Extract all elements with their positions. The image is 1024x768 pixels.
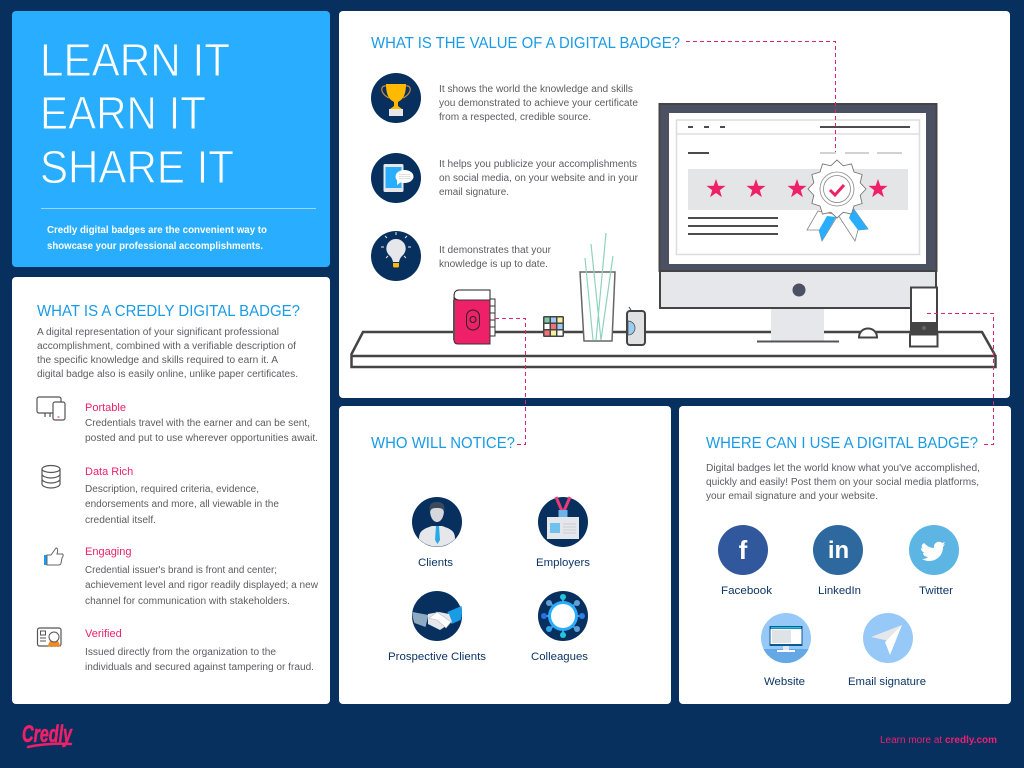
hero subtitle: showcase your professional accomplishments. xyxy=(47,240,263,252)
icon: email signature xyxy=(863,613,913,663)
icon: tablet with speech bubble xyxy=(371,153,421,203)
item: portable: Credentials travel with the earner and can be sent, xyxy=(85,418,310,429)
intro text: Digital badges let the world know what you've accomplished, xyxy=(706,463,980,474)
item: data rich: credential itself. xyxy=(85,515,156,526)
item: engaging xyxy=(85,546,319,607)
icon: trophy xyxy=(371,73,421,123)
title: EARN IT xyxy=(40,87,206,139)
value text 3 xyxy=(439,245,552,270)
illustration: phone on dock xyxy=(910,288,938,346)
illustration: monitor xyxy=(660,104,936,342)
heading: WHERE CAN I USE A DIGITAL BADGE? xyxy=(706,435,978,452)
item: data rich: Description, required criteria, evidence, xyxy=(85,484,259,495)
dashed connector: value heading to monitor xyxy=(686,42,836,152)
label: Facebook xyxy=(721,585,773,597)
icon: linkedin xyxy=(813,525,863,575)
icon: colleagues xyxy=(538,591,588,641)
item: portable xyxy=(85,402,318,444)
label: Prospective Clients xyxy=(388,651,487,663)
definition text: the specific knowledge and skills required to earn it. A xyxy=(37,355,278,366)
logo: Credly xyxy=(22,721,73,748)
item: verified: Issued directly from the organization to the xyxy=(85,647,276,658)
dashed connector: notebook to who will notice xyxy=(495,318,526,444)
item: portable: posted and put to use wherever opportunities await. xyxy=(85,433,318,444)
item: data rich xyxy=(85,466,279,526)
icon: clients xyxy=(412,497,462,547)
value text 1: It shows the world the knowledge and skills xyxy=(439,84,633,95)
icon: linkedin: in xyxy=(828,537,849,564)
intro text: quickly and easily! Post them on your social media platforms, xyxy=(706,477,979,488)
label: LinkedIn xyxy=(818,585,861,597)
icon: twitter xyxy=(909,525,959,575)
item: data rich: Data Rich xyxy=(85,466,133,478)
label: Website xyxy=(764,676,805,688)
value text 2: It helps you publicize your accomplishments xyxy=(439,159,637,170)
icon: database xyxy=(42,466,60,488)
heading: WHO WILL NOTICE? xyxy=(371,435,515,452)
hero subtitle xyxy=(47,224,267,252)
illustration: badge with ribbons xyxy=(807,160,868,241)
icon: prospective clients xyxy=(412,591,462,641)
label: Twitter xyxy=(919,585,953,597)
value text 2: email signature. xyxy=(439,187,509,198)
icon: certificate xyxy=(38,628,61,647)
icon: website xyxy=(761,613,811,663)
item: verified: Verified xyxy=(85,628,122,640)
icon: thumbs up xyxy=(44,548,63,565)
heading: WHAT IS A CREDLY DIGITAL BADGE? xyxy=(37,303,300,320)
item: verified xyxy=(85,628,314,673)
hero subtitle: Credly digital badges are the convenient way to xyxy=(47,224,267,236)
icon: light bulb xyxy=(371,231,421,281)
panel: who will notice xyxy=(339,406,671,704)
illustration: colour cube xyxy=(543,316,564,337)
definition text: accomplishment, combined with a verifiable description of xyxy=(37,341,296,352)
illustration: notebook xyxy=(454,290,495,344)
desk xyxy=(351,332,996,367)
label: Clients xyxy=(418,557,454,569)
item: portable: Portable xyxy=(85,402,126,414)
dashed connector: phone to where can i use xyxy=(927,314,994,444)
value text 2: on social media, on your website and in your xyxy=(439,173,639,184)
definition text: digital badge also is easily online, unlike paper certificates. xyxy=(37,369,298,380)
item: engaging: achievement level and rigor readily displayed; a new xyxy=(85,580,319,591)
illustration: camera xyxy=(627,307,645,345)
logo: Credly: Credly xyxy=(22,721,73,748)
intro text xyxy=(706,463,980,502)
item: engaging: Credential issuer's brand is front and center; xyxy=(85,565,277,576)
value text 3: It demonstrates that your xyxy=(439,245,552,256)
intro text: your email signature and your website. xyxy=(706,491,878,502)
title: SHARE IT xyxy=(40,141,234,193)
icon: facebook: f xyxy=(739,535,748,565)
heading: WHAT IS THE VALUE OF A DIGITAL BADGE? xyxy=(371,35,680,52)
icon: employers xyxy=(538,497,588,547)
panel: value of a digital badge xyxy=(339,11,1010,398)
item: verified: individuals and secured against tampering or fraud. xyxy=(85,662,314,673)
definition text: A digital representation of your significant professional xyxy=(37,327,279,338)
title: LEARN IT xyxy=(40,34,230,86)
value text 1: you demonstrated to achieve your certificate xyxy=(439,98,638,109)
illustration: glass with reeds xyxy=(580,233,615,341)
panel: what is a credly digital badge xyxy=(12,277,330,704)
panel: where can i use a digital badge xyxy=(679,406,1011,704)
definition text xyxy=(37,327,298,380)
panel: hero xyxy=(12,11,330,267)
value text 2 xyxy=(439,159,639,198)
icon: facebook xyxy=(718,525,768,575)
label: Employers xyxy=(536,557,591,569)
value text 1: from a respected, credible source. xyxy=(439,112,591,123)
item: data rich: endorsements and more, all viewable in the xyxy=(85,499,279,510)
title xyxy=(40,34,234,193)
label: Email signature xyxy=(848,676,926,688)
value text 1 xyxy=(439,84,638,123)
icon: devices xyxy=(37,397,65,420)
illustration: desk lamp dome xyxy=(859,328,877,338)
item: engaging: channel for communication with stakeholders. xyxy=(85,596,290,607)
footer link: Learn more at credly.com xyxy=(880,735,997,746)
value text 3: knowledge is up to date. xyxy=(439,259,548,270)
item: engaging: Engaging xyxy=(85,546,132,558)
label: Colleagues xyxy=(531,651,589,663)
